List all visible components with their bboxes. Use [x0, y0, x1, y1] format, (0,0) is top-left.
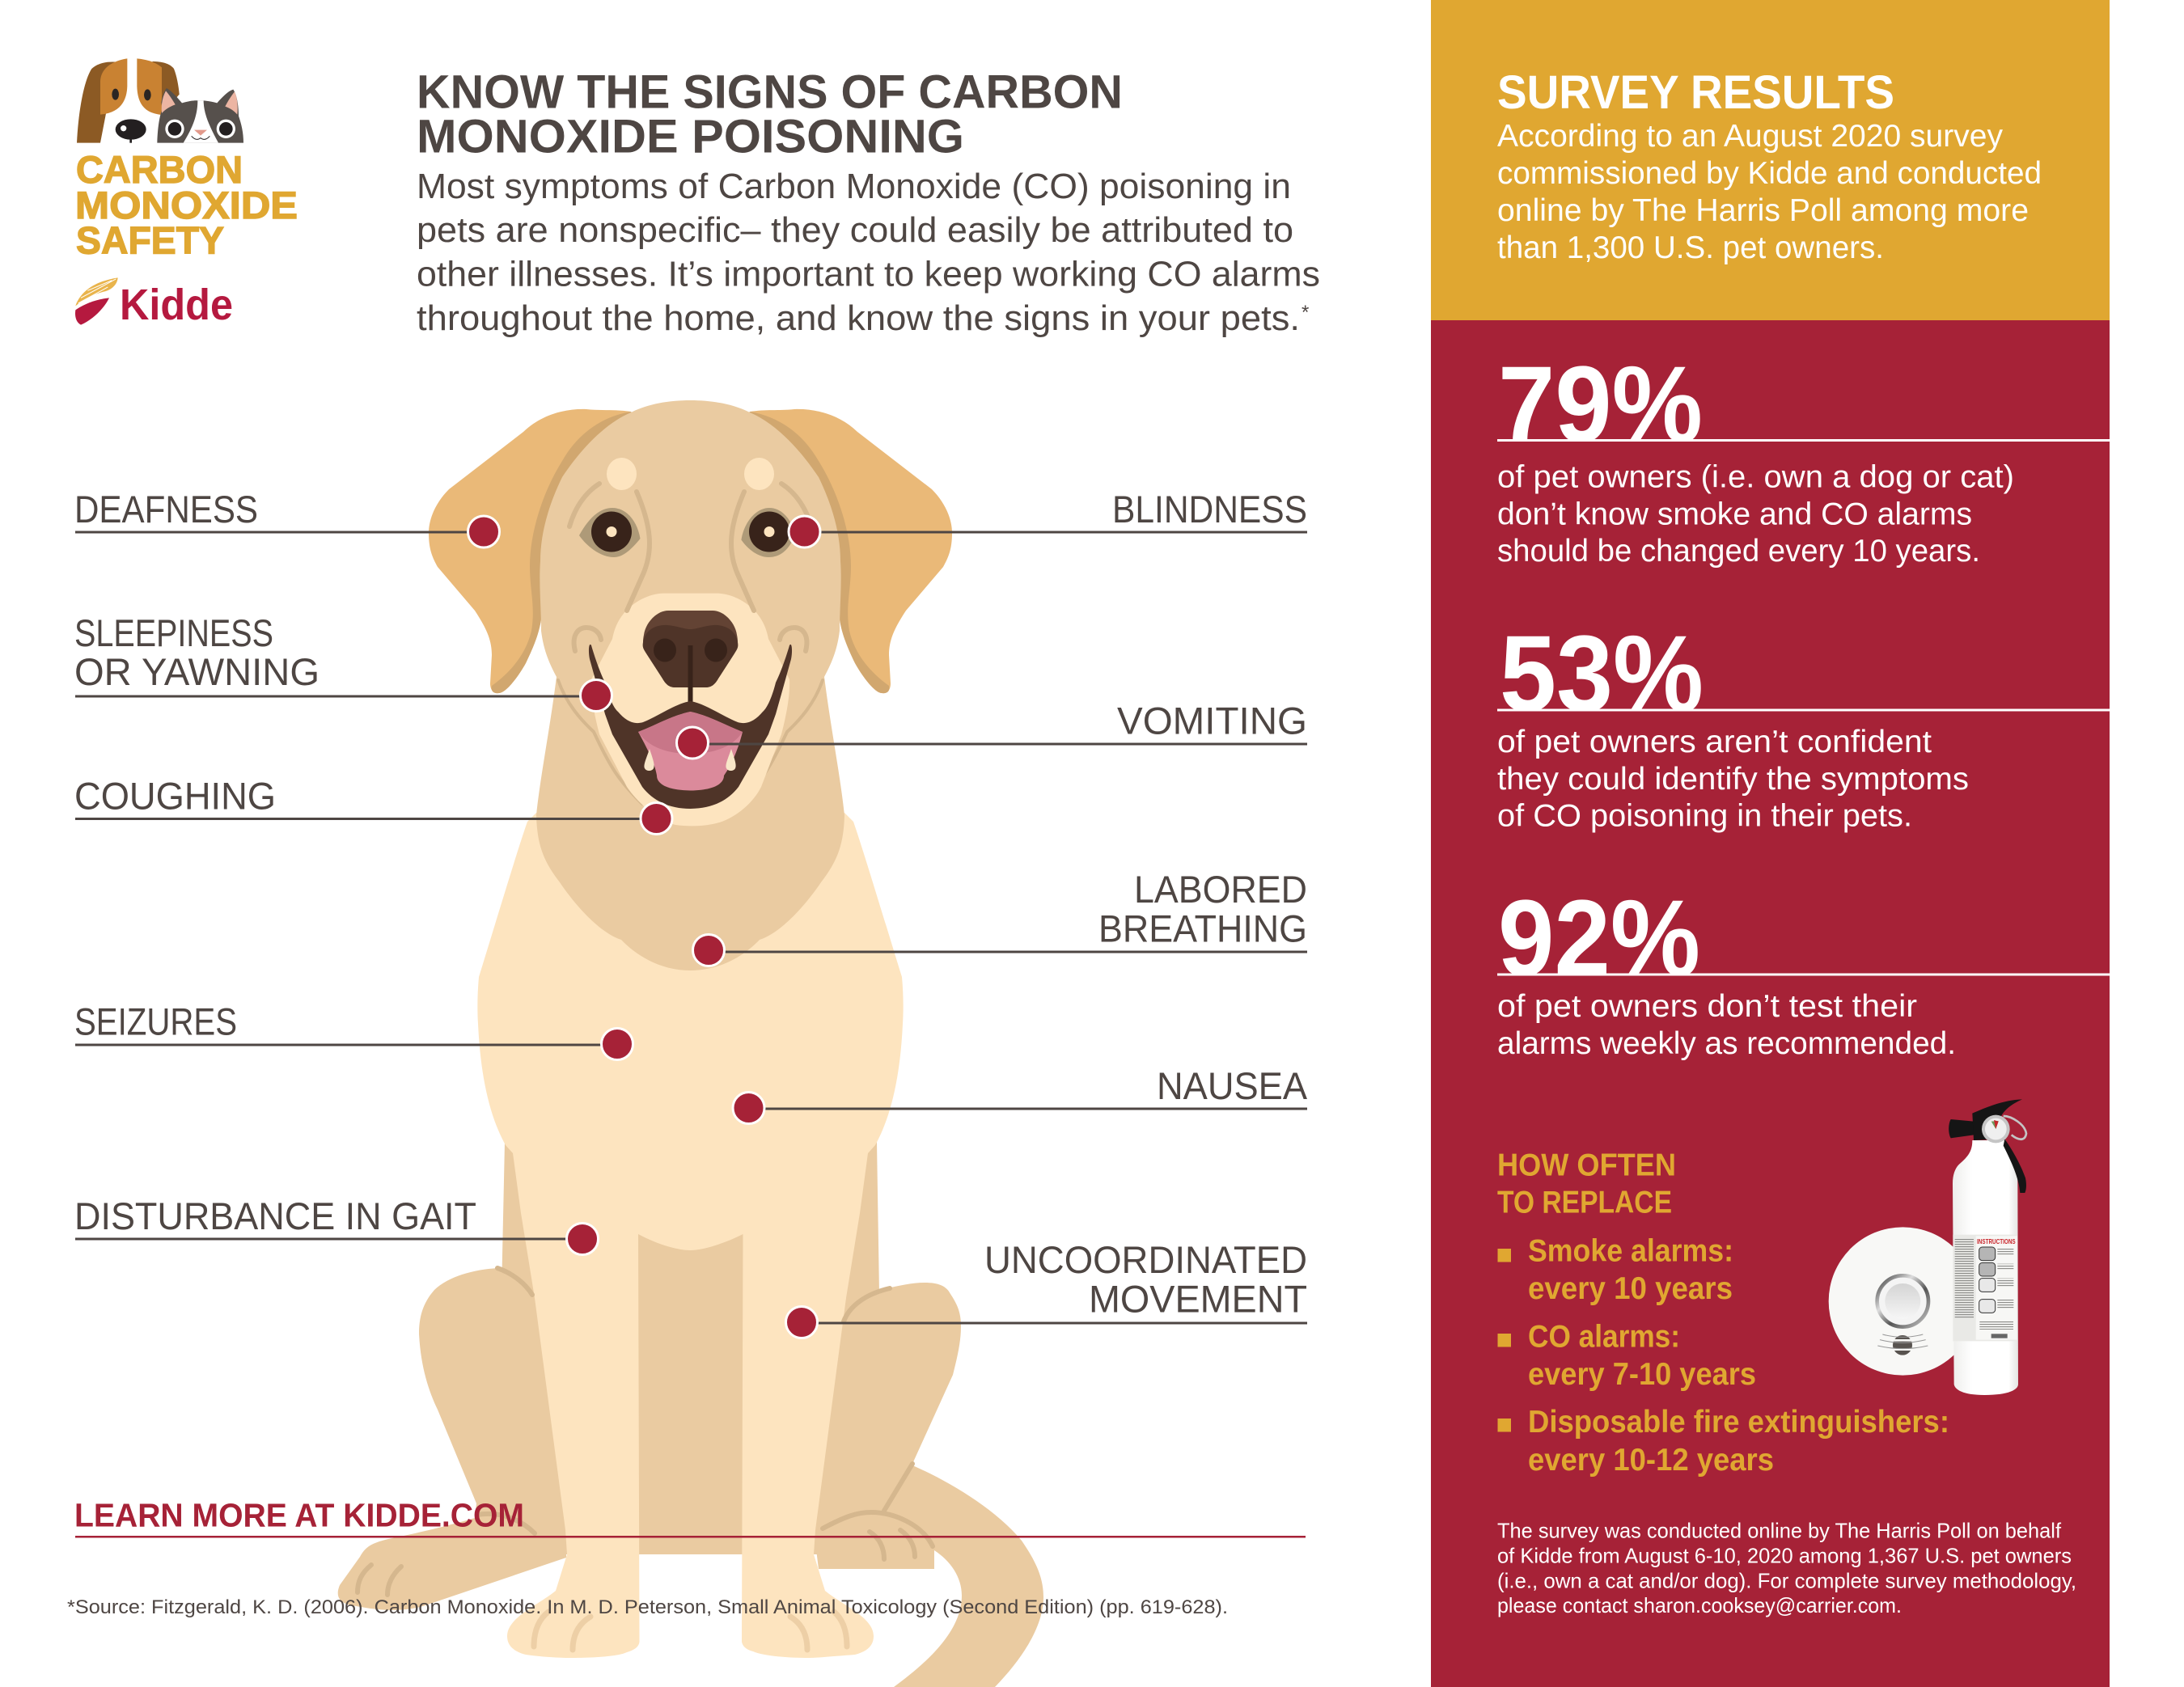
- intro text: [417, 167, 1320, 338]
- survey methodology note: The survey was conducted online by The Harris Poll on behalf: [1497, 1519, 2062, 1543]
- yellow header block: [1431, 0, 2110, 320]
- label: uncoordinated movement: UNCOORDINATED: [984, 1238, 1307, 1281]
- photo: smoke alarm and fire extinguisher: [1829, 1099, 2026, 1395]
- label: sleepiness or yawning: OR YAWNING: [74, 650, 320, 693]
- dog hind body: [502, 1142, 879, 1554]
- logo: Kidde: [75, 277, 233, 329]
- yellow header block: According to an August 2020 survey: [1497, 119, 2003, 154]
- stat 79%: 79%: [1498, 345, 1703, 465]
- logo: dog and cat: [77, 58, 243, 143]
- dog brow spots: [607, 458, 774, 490]
- dog face creases: [569, 484, 811, 651]
- logo wordmark: carbon monoxide safety: CARBON: [76, 148, 243, 191]
- stat 53%: they could identify the symptoms: [1497, 762, 1969, 797]
- stat 79%: [1497, 345, 2110, 569]
- dog leg and paw creases: [358, 1268, 933, 1650]
- illustration: sitting dog: [338, 400, 1043, 1687]
- icon: alarm: [1829, 1227, 1977, 1376]
- label: disturbance in gait: [74, 1194, 599, 1255]
- dog head and neck: [536, 400, 844, 970]
- label: coughing: COUGHING: [74, 775, 276, 817]
- survey methodology note: please contact sharon.cooksey@carrier.com.: [1497, 1593, 1902, 1617]
- dog left ear: [429, 409, 639, 693]
- logo wordmark: carbon monoxide safety: SAFETY: [76, 218, 224, 262]
- stat 79%: don’t know smoke and CO alarms: [1497, 497, 1972, 532]
- dog left eye: [579, 508, 641, 557]
- stat 92%: of pet owners don’t test their: [1497, 989, 1917, 1024]
- logo wordmark: carbon monoxide safety: [75, 148, 298, 262]
- yellow header block: SURVEY RESULTS: [1497, 66, 1894, 119]
- how often to replace list: TO REPLACE: [1497, 1186, 1672, 1220]
- label: labored breathing: [692, 868, 1307, 966]
- how often to replace list: Disposable fire extinguishers:: [1528, 1405, 1949, 1440]
- intro text: throughout the home, and know the signs in your pets.: [417, 298, 1300, 338]
- intro text: *: [1302, 302, 1309, 323]
- dog right haunch: [815, 1283, 961, 1569]
- stat 79%: should be changed every 10 years.: [1497, 534, 1980, 569]
- label: vomiting: [676, 699, 1307, 759]
- survey methodology note: [1497, 1519, 2076, 1617]
- label: labored breathing: LABORED: [1134, 868, 1307, 911]
- intro text: Most symptoms of Carbon Monoxide (CO) poisoning in: [417, 167, 1291, 206]
- stat 79%: of pet owners (i.e. own a dog or cat): [1497, 459, 2014, 495]
- dog right ear: [742, 409, 952, 693]
- how often to replace list: [1497, 1148, 1949, 1478]
- dog right eye: [741, 508, 795, 557]
- label: deafness: DEAFNESS: [74, 488, 258, 531]
- dog chest and front legs: [477, 813, 904, 1658]
- dog tail: [890, 1465, 1043, 1687]
- how often to replace list: every 10 years: [1528, 1271, 1733, 1306]
- label: blindness: BLINDNESS: [1112, 488, 1307, 531]
- label: nausea: NAUSEA: [1157, 1064, 1308, 1107]
- label: vomiting: VOMITING: [1117, 699, 1307, 742]
- label: uncoordinated movement: [786, 1238, 1307, 1338]
- stat 92%: 92%: [1498, 878, 1700, 999]
- how often to replace list: every 10-12 years: [1528, 1443, 1774, 1478]
- yellow header block: online by The Harris Poll among more: [1497, 193, 2029, 228]
- label: seizures: SEIZURES: [74, 1000, 237, 1043]
- label: sleepiness or yawning: SLEEPINESS: [74, 611, 273, 654]
- stat 53%: 53%: [1500, 614, 1704, 734]
- panel: survey results: [1431, 0, 2110, 1687]
- label: disturbance in gait: DISTURBANCE IN GAIT: [74, 1194, 476, 1237]
- heading: [417, 66, 1123, 163]
- how often to replace list: Smoke alarms:: [1528, 1234, 1733, 1268]
- stat 53%: of pet owners aren’t confident: [1497, 725, 1932, 759]
- intro text: other illnesses. It’s important to keep working CO alarms: [417, 254, 1320, 294]
- stat 92%: [1497, 878, 2110, 1061]
- icon: fire extinguisher: [1949, 1099, 2026, 1395]
- label: uncoordinated movement: MOVEMENT: [1089, 1278, 1307, 1320]
- crimson panel background: [1431, 320, 2110, 1687]
- label: seizures: [74, 1000, 633, 1059]
- how often to replace list: CO alarms:: [1528, 1320, 1680, 1354]
- heading: MONOXIDE POISONING: [417, 110, 964, 163]
- heading: KNOW THE SIGNS OF CARBON: [417, 66, 1123, 118]
- logo: Kidde: Kidde: [120, 281, 233, 329]
- dog left haunch: [338, 1268, 566, 1610]
- stat 53%: [1497, 614, 2110, 833]
- intro text: pets are nonspecific– they could easily be attributed to: [417, 210, 1293, 250]
- how often to replace list: HOW OFTEN: [1497, 1148, 1676, 1182]
- source footnote: *Source: Fitzgerald, K. D. (2006). Carbon Monoxide. In M. D. Peterson, Small Animal Toxicology (Second Edition) (pp. 619-628).: [67, 1596, 1228, 1618]
- learn more link text: LEARN MORE AT KIDDE.COM: [74, 1496, 524, 1533]
- survey methodology note: (i.e., own a cat and/or dog). For complete survey methodology,: [1497, 1569, 2076, 1593]
- yellow header block: than 1,300 U.S. pet owners.: [1497, 230, 1884, 265]
- how often to replace list: every 7-10 years: [1528, 1357, 1756, 1392]
- label: blindness: [789, 488, 1307, 548]
- stat 53%: of CO poisoning in their pets.: [1497, 799, 1912, 833]
- label: coughing: [74, 775, 672, 835]
- dog mouth: [589, 645, 792, 809]
- label: nausea: [733, 1064, 1308, 1124]
- label: deafness: [74, 488, 500, 548]
- dog nose: [643, 611, 738, 712]
- survey methodology note: of Kidde from August 6-10, 2020 among 1,367 U.S. pet owners: [1497, 1543, 2072, 1567]
- logo wordmark: carbon monoxide safety: MONOXIDE: [75, 184, 298, 226]
- yellow header block: commissioned by Kidde and conducted: [1497, 156, 2042, 191]
- stat 92%: alarms weekly as recommended.: [1497, 1026, 1956, 1061]
- label: labored breathing: BREATHING: [1098, 907, 1307, 949]
- icon: fire extinguisher: INSTRUCTIONS: [1977, 1237, 2016, 1245]
- dog muzzle: [591, 594, 789, 826]
- label: sleepiness or yawning: [74, 611, 612, 712]
- dog jaw creases: [558, 680, 823, 804]
